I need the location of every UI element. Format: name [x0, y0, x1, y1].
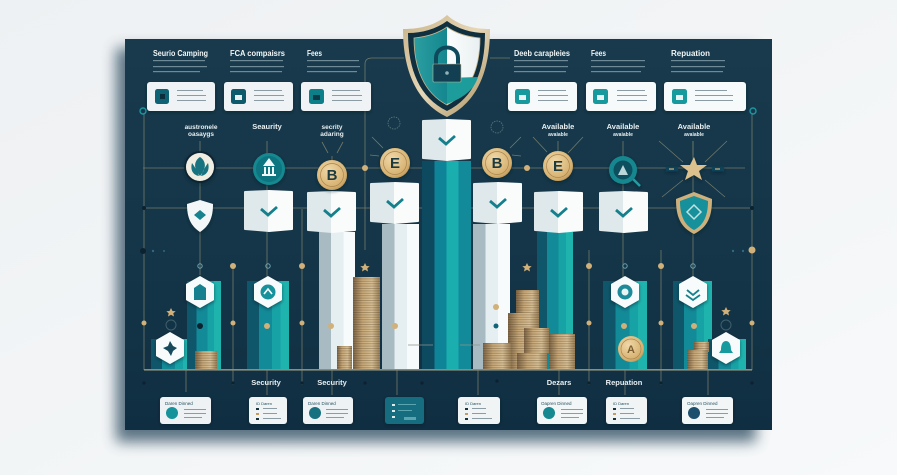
baseline: [144, 369, 752, 371]
stack 2: [337, 346, 352, 369]
bar: central teal: [422, 161, 471, 370]
footer card 3: Daren Dinned: [308, 401, 336, 406]
bar: small teal left: [151, 339, 191, 370]
hex 1: [186, 276, 214, 308]
hexagon badges: [156, 276, 740, 364]
stack right: [687, 342, 709, 369]
cube 4: [474, 183, 521, 223]
card 2: [224, 82, 293, 111]
icon: pound coin: E: [390, 155, 400, 172]
heading: FCA compaisrs: [230, 49, 286, 72]
bar: teal 3: [537, 232, 573, 370]
bar: teal 4: [603, 281, 647, 370]
row labels above icons: avaiable: [684, 132, 704, 138]
icon: star: [666, 157, 724, 180]
hex left small: [156, 332, 184, 364]
heading: Repuation: Repuation: [671, 49, 710, 58]
footer card 8: Oapren Dinned: [687, 401, 718, 406]
bar: teal 1: [187, 281, 221, 370]
row labels above icons: [185, 122, 710, 138]
footer card 5: ID Daren: [465, 401, 481, 406]
main dark panel: [125, 39, 772, 430]
footer card 5: [458, 397, 500, 424]
ring node right: [750, 108, 756, 114]
heading: Deeb carapleies: Deeb carapleies: [514, 49, 570, 58]
bar: small teal right: [708, 339, 746, 370]
footer cards: [160, 397, 733, 424]
bar: white 1: [319, 232, 355, 370]
footer card 7: [606, 397, 647, 424]
cube 6: [600, 192, 647, 232]
cube check markers: [245, 120, 647, 232]
cube 2: [308, 192, 355, 232]
stack 3: [353, 277, 380, 369]
icon row: [185, 148, 724, 234]
stack cluster: [483, 290, 575, 369]
cube center: [423, 120, 470, 160]
footer card 6: [537, 397, 587, 424]
ring node left: [140, 108, 146, 114]
panel drop shadow: [116, 48, 756, 442]
heading: Fees: [307, 49, 360, 72]
hex 2: [254, 276, 282, 308]
footer card 6: Oapren Dinned: [541, 401, 572, 406]
row labels above icons: oasaygs: [188, 131, 214, 138]
connector dots: [142, 165, 756, 329]
connector grid: [143, 58, 752, 395]
hex 3: [611, 276, 639, 308]
row labels above icons: Available: [607, 122, 639, 131]
icon: white shield: [187, 200, 213, 232]
heading: Fees: Fees: [307, 49, 322, 58]
icon: bitcoin coin right: B: [492, 155, 503, 172]
icon: pound coin: [380, 148, 410, 178]
row labels above icons: avaiable: [548, 132, 568, 138]
footer card 2: ID Daren: [256, 401, 272, 406]
icon: gold shield: [676, 192, 712, 234]
padlock: [433, 48, 461, 82]
coin stacks: [195, 277, 709, 369]
footer card 7: ID Daren: [613, 401, 629, 406]
footer card 3: [303, 397, 353, 424]
card 3: [301, 82, 371, 111]
footer card 8: [682, 397, 733, 424]
medal coin on teal bar: [618, 336, 644, 362]
bar: white 2: [382, 224, 419, 370]
bottom section labels: Security: [317, 378, 348, 387]
medal coin on teal bar: A: [627, 344, 635, 356]
footer card 1: Daren Dinned: [165, 401, 193, 406]
row labels above icons: avaiable: [613, 132, 633, 138]
row labels above icons: secrity: [322, 124, 343, 131]
icon: bitcoin coin right: [482, 148, 512, 178]
card 1: [147, 82, 215, 111]
dark connector dots: [140, 206, 754, 385]
bar: teal 2: [247, 281, 289, 370]
bar: teal 5: [673, 281, 712, 370]
footer card teal: [385, 397, 424, 424]
card 5: [586, 82, 656, 111]
heading: FCA compaisrs: FCA compaisrs: [230, 49, 286, 58]
icon: magnifier: [609, 156, 640, 186]
cube 3: [371, 183, 418, 223]
small rings above hexagons: [166, 264, 731, 330]
bar: white 3: [473, 224, 510, 370]
bottom section labels: Dezars: [547, 378, 571, 387]
small gear icons near shield: [388, 117, 503, 133]
heading: Deeb carapleies: [514, 49, 570, 72]
cube 1: [245, 191, 292, 231]
card row: top feature cards: [147, 82, 746, 111]
heading: Repuation: [671, 49, 725, 72]
icon: leaf: [185, 152, 215, 182]
footer card 1: [160, 397, 211, 424]
card 4: [508, 82, 577, 111]
icon: pound coin right: E: [553, 158, 563, 175]
cube 5: [535, 192, 582, 232]
icon: bitcoin coin: [317, 160, 347, 190]
icon: building: [253, 153, 285, 185]
heading: Fees right: Fees: [591, 49, 606, 58]
card 6: [664, 82, 746, 111]
row labels above icons: Seaurity: [252, 122, 283, 131]
heading: Seurio Camping: [153, 49, 208, 72]
icon: bitcoin coin: B: [327, 167, 338, 184]
footer card 2: [249, 397, 287, 424]
hex 4: [679, 276, 707, 308]
icon: pound coin right: [543, 151, 573, 181]
bottom section labels: Repuation: [606, 378, 643, 387]
central shield with padlock: [403, 15, 490, 117]
bottom section labels: [251, 378, 643, 387]
row labels above icons: austronele: [185, 124, 218, 131]
hex right small: [712, 332, 740, 364]
stack 1: [195, 351, 217, 369]
heading: Seurio Camping: Seurio Camping: [153, 49, 208, 58]
row labels above icons: Available: [542, 122, 574, 131]
row labels above icons: Available: [678, 122, 710, 131]
bottom section labels: Security: [251, 378, 282, 387]
tick lines over white bars: [408, 344, 480, 346]
row labels above icons: adaring: [320, 131, 344, 138]
heading: Fees right: [591, 49, 645, 72]
